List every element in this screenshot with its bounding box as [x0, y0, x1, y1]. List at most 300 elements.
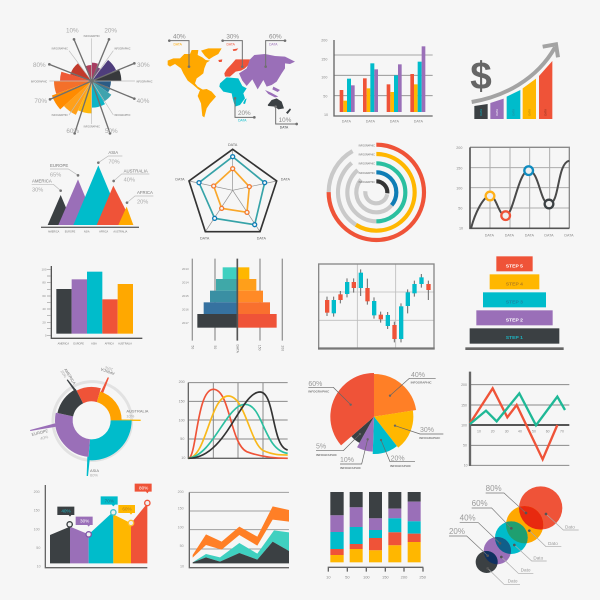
axis labels: 50: [345, 574, 350, 579]
bottom rotated labels: 150: [258, 345, 262, 351]
rose percentage labels: 50%: [105, 128, 118, 135]
region names: AUSTRALIA: [124, 168, 148, 173]
x axis labels: [48, 231, 128, 234]
right bars: [237, 267, 277, 328]
leader dots: [59, 161, 128, 204]
category labels: AFRICA: [105, 343, 114, 346]
panel: concentric ring chart: [324, 140, 429, 245]
radar labels: DATA: [228, 143, 238, 147]
panel: stacked bar chart: [326, 492, 427, 579]
axis labels: 100: [363, 574, 370, 579]
rose leader dots: [48, 38, 136, 135]
ring labels: INFOGRAPHIC: [359, 172, 375, 175]
axis labels: 50: [458, 207, 462, 211]
chart axes: [470, 147, 569, 228]
axis labels: 20: [42, 320, 46, 324]
map data labels: DATA: [173, 43, 183, 47]
bar data labels: DATA: [544, 109, 548, 116]
data markers: [486, 166, 553, 220]
axis labels: 40: [518, 430, 522, 434]
rose percentage labels: 10%: [66, 28, 79, 35]
map data labels: DATA: [280, 125, 289, 129]
region percentages: 70%: [108, 159, 120, 165]
pie percentages: [308, 372, 434, 464]
donut labels: 20%: [59, 369, 68, 379]
dark curve: [188, 392, 288, 458]
axis labels: 100: [461, 424, 467, 428]
pie percentages: 60%: [308, 381, 322, 388]
chart grid: [189, 492, 289, 549]
axis labels: DATA: [390, 119, 399, 123]
chart grid: [319, 264, 434, 349]
panel: candlestick chart: [318, 264, 435, 349]
chart frame: [319, 264, 434, 349]
panel: population pyramid: [182, 259, 284, 354]
rose infographic captions: INFOGRAPHIC: [136, 81, 153, 84]
ring labels: INFOGRAPHIC: [359, 163, 375, 166]
radar orange polygon: [214, 169, 249, 212]
rose infographic captions: INFOGRAPHIC: [52, 47, 68, 50]
radar labels: DATA: [175, 177, 185, 181]
axis labels: 200: [401, 574, 408, 579]
rose percentage labels: 70%: [34, 98, 47, 105]
donut labels: EUROPE: [31, 428, 49, 437]
axis labels: [179, 380, 185, 460]
axis labels: 10: [326, 574, 331, 579]
axis labels: DATA: [525, 234, 534, 238]
axis labels: 200: [461, 383, 467, 387]
rose infographic captions: [31, 35, 153, 129]
rose percentage labels: 60%: [66, 128, 79, 135]
radar labels: DATA: [257, 236, 266, 240]
bubble percentages: 40%: [460, 514, 476, 523]
callout 30%: 30%: [80, 519, 89, 524]
ring labels: [359, 144, 375, 184]
map: Australia: [268, 98, 291, 114]
axis labels: 100: [42, 268, 47, 272]
pie infographic captions: INFOGRAPHIC: [340, 466, 362, 470]
map data labels: DATA: [238, 118, 247, 122]
growth bars: [474, 61, 552, 119]
axis labels: 10: [459, 227, 463, 231]
vertical axis: [466, 372, 473, 466]
map landmasses: [168, 48, 295, 117]
donut segments: [56, 385, 127, 456]
chart frame: [470, 147, 569, 228]
panel: radial rose chart: [31, 28, 153, 135]
bars: [56, 272, 133, 334]
map percentage labels: 20%: [238, 110, 251, 117]
radar labels: DATA: [200, 236, 210, 240]
axis labels: 60: [546, 430, 550, 434]
region names: [32, 150, 153, 195]
panel: overlapping bubbles: [449, 484, 579, 584]
bar data labels: DATA: [479, 109, 483, 116]
pie percentages: 10%: [340, 457, 354, 464]
bubble leader lines: [449, 493, 579, 584]
horizontal grid: [470, 385, 569, 465]
rose wedges: [62, 51, 122, 111]
step base: [465, 347, 564, 350]
bubble leader dots: [486, 512, 547, 570]
area segments: [50, 503, 147, 563]
radar spokes: [189, 149, 277, 232]
region percentages: 30%: [32, 188, 43, 194]
year labels: [182, 267, 189, 325]
pie infographic captions: [308, 381, 441, 470]
mountain peaks: [48, 165, 133, 225]
panel: callout area chart: [34, 484, 152, 568]
panel: zigzag line chart: [461, 372, 569, 468]
x axis labels: EUROPE: [65, 231, 76, 234]
category labels: [58, 343, 132, 346]
teal band: [193, 530, 289, 562]
axis labels: 0: [45, 333, 47, 337]
axes and ticks: [51, 266, 142, 338]
donut pointers: [30, 377, 141, 476]
callout 80%: 80%: [139, 485, 148, 490]
donut labels: 10%: [126, 413, 135, 418]
bottom rotated labels: 200: [280, 346, 284, 351]
bubble captions: Dato: [565, 524, 575, 529]
axis labels: 150: [321, 57, 327, 61]
panel: pie chart: [308, 372, 443, 470]
teal candles: [332, 273, 424, 339]
axis labels: 30: [505, 430, 509, 434]
category labels: ASIA: [91, 343, 97, 346]
axis labels: 80: [42, 281, 46, 285]
donut labels: AFRICA: [100, 367, 115, 376]
axis labels: DATA: [414, 119, 423, 123]
group 2 bars: [363, 63, 378, 112]
chart grid: [470, 147, 569, 228]
axis labels: DATA: [342, 119, 351, 123]
axis labels: DATA: [485, 234, 494, 238]
bar data labels: DATA: [527, 109, 531, 116]
radar labels: [175, 143, 290, 240]
chart markers: [67, 500, 150, 537]
map data labels: DATA: [269, 43, 278, 47]
donut labels: 60%: [90, 472, 98, 477]
rose infographic captions: INFOGRAPHIC: [114, 47, 131, 50]
region percentages: 65%: [50, 172, 61, 178]
green line: [470, 393, 565, 425]
column 4: [388, 492, 401, 562]
pie infographic captions: INFOGRAPHIC: [411, 381, 432, 385]
axis labels: 60: [42, 294, 46, 298]
bubble percentages: 20%: [449, 527, 465, 536]
axis labels: 150: [34, 509, 40, 513]
ring labels: INFOGRAPHIC: [359, 181, 375, 184]
rose thick leader lines: [49, 39, 134, 133]
panel: donut chart: [30, 365, 149, 477]
axis labels: 20: [491, 430, 495, 434]
panel: smooth line chart: [456, 146, 574, 238]
red line: [470, 388, 557, 459]
axis labels: [321, 39, 423, 123]
axis labels: [461, 383, 564, 468]
axis labels: 150: [382, 574, 389, 579]
bar data labels: DATA: [495, 109, 499, 116]
red candles: [325, 282, 431, 339]
orange band: [193, 506, 289, 558]
year labels: 2014: [182, 280, 189, 284]
axis labels: 50: [180, 544, 184, 548]
rose percentage labels: 40%: [137, 98, 150, 105]
region percentages: 20%: [137, 199, 148, 205]
yellow curve: [188, 396, 288, 458]
rose percentage labels: 30%: [137, 62, 150, 69]
pie percentages: 20%: [391, 455, 405, 462]
left bars: [197, 267, 237, 328]
axis labels: 10: [180, 564, 184, 568]
step 1: STEP 1: [506, 335, 523, 341]
axis labels: 10: [37, 564, 41, 568]
axis labels: 200: [321, 39, 327, 43]
year labels: 2016: [182, 308, 189, 312]
pie infographic captions: INFOGRAPHIC: [316, 453, 338, 457]
x axis labels: AMERICA: [48, 231, 60, 234]
baseline: [41, 225, 139, 229]
rose percentage labels: 20%: [104, 28, 117, 35]
axis labels: 10: [181, 456, 185, 460]
panel: bell curves chart: [179, 380, 288, 460]
pie infographic captions: INFOGRAPHIC: [390, 464, 412, 468]
chart axes: [189, 492, 289, 568]
map leader lines: [169, 41, 297, 124]
icon: dollar sign: $: [470, 55, 492, 98]
blue ring: [356, 172, 396, 212]
axis labels: 100: [178, 525, 184, 529]
donut labels: [31, 365, 149, 477]
year labels: 2015: [182, 294, 189, 298]
group 1 bars: [340, 79, 355, 112]
dark band: [193, 542, 289, 563]
axis labels: [178, 490, 184, 568]
yellow ring: [338, 154, 415, 231]
axis labels: 150: [456, 166, 462, 170]
rose infographic captions: INFOGRAPHIC: [52, 114, 68, 117]
bubble percentages: [449, 484, 502, 536]
group 3 bars: [387, 64, 402, 112]
bubble percentages: 60%: [472, 499, 488, 508]
axis labels: DATA: [505, 234, 514, 238]
teal ring: [347, 163, 405, 221]
radar blue nodes: [197, 155, 267, 227]
step 4: STEP 4: [506, 281, 523, 287]
panel: world map: [168, 33, 298, 129]
bubble overlaps: [484, 506, 544, 564]
grey ring tracks: [324, 140, 429, 245]
donut labels: ASIA: [90, 468, 99, 473]
axis labels: 150: [179, 400, 185, 404]
axis labels: 50: [180, 437, 184, 441]
chart axes: [334, 40, 433, 116]
panel: step pyramid: [465, 256, 564, 350]
pie leader dots: [349, 394, 396, 441]
donut labels: AMERICA: [63, 367, 77, 386]
radar labels: DATA: [281, 178, 290, 182]
panel: radar chart: [175, 143, 290, 240]
map percentage labels: 60%: [269, 33, 282, 40]
bubbles: [476, 486, 562, 573]
map: Americas: [168, 48, 222, 117]
grid verticals: [192, 259, 282, 341]
bottom rotated labels: 50: [213, 345, 217, 349]
donut labels: 40%: [40, 434, 49, 441]
panel: region bar chart: [42, 266, 142, 346]
x axis labels: ASIA: [84, 231, 90, 234]
map leader dots: [168, 39, 298, 125]
bubble captions: Dato: [521, 568, 531, 573]
region names: AMERICA: [32, 178, 52, 183]
bubble captions: Dato: [533, 555, 544, 560]
region names: ASIA: [108, 150, 118, 155]
axis labels: 70: [560, 430, 564, 434]
rose infographic captions: INFOGRAPHIC: [114, 114, 131, 117]
region names: AFRICA: [137, 190, 153, 195]
year labels: 2013: [182, 267, 189, 271]
rose percentage labels: 80%: [33, 62, 46, 69]
donut labels: AUSTRALIA: [126, 409, 149, 414]
radar outer pentagon: [189, 149, 277, 232]
axis labels: [34, 490, 41, 568]
red ring: [329, 145, 424, 240]
ring labels: INFOGRAPHIC: [359, 144, 375, 147]
pie percentages: 40%: [411, 372, 425, 379]
chart grid: [188, 383, 288, 458]
axis labels: 200: [179, 380, 185, 384]
map data labels: DATA: [226, 43, 236, 47]
axis labels: 50: [36, 546, 40, 550]
axis labels: 150: [461, 403, 467, 407]
map percentage labels: [173, 33, 292, 124]
axis and ticks: [328, 567, 423, 572]
axis labels: 50: [463, 444, 467, 448]
step 5: STEP 5: [506, 263, 523, 269]
bottom rotated labels: 50: [191, 345, 195, 349]
panel: grouped bar chart: [321, 39, 433, 123]
region percentages: 40%: [124, 178, 135, 184]
x axis labels: AFRICA: [99, 231, 109, 234]
axis labels: 50: [323, 94, 327, 98]
ring labels: INFOGRAPHIC: [359, 154, 375, 157]
axis labels: 100: [321, 76, 327, 80]
step 2: STEP 2: [506, 317, 523, 323]
panel: stacked area chart: [178, 490, 289, 568]
column 1: [330, 492, 344, 562]
map: Africa: [219, 77, 247, 107]
map: Europe: [218, 48, 250, 77]
region percentages: [32, 159, 148, 205]
red curve: [188, 389, 288, 458]
axis labels: [456, 146, 574, 238]
x axis labels: AUSTRALIA: [113, 231, 128, 234]
axis labels: 100: [456, 186, 462, 190]
panel: dollar growth chart: [470, 44, 558, 119]
axis labels: 200: [178, 490, 184, 494]
axis labels: 10: [324, 113, 328, 117]
map percentage labels: 10%: [279, 117, 292, 124]
bar data labels: [479, 109, 548, 116]
group 4 bars: [410, 46, 425, 112]
axis labels: 200: [34, 490, 40, 494]
category labels: EUROPE: [73, 343, 84, 346]
year labels: 2017: [182, 321, 189, 325]
axis labels: 100: [34, 527, 40, 531]
pie percentages: 5%: [316, 444, 326, 451]
candle wicks: [327, 269, 428, 342]
rose infographic captions: INFOGRAPHIC: [84, 126, 100, 129]
chart axes: [188, 383, 288, 458]
axis labels: 40: [42, 307, 46, 311]
callout 40%: 40%: [61, 509, 71, 514]
axis labels: DATA: [564, 234, 574, 238]
bottom rotated labels: [191, 344, 284, 354]
map: Asia: [239, 54, 295, 97]
rose percentage labels: [33, 28, 150, 135]
pie slices: [343, 386, 405, 447]
axis labels: DATA: [544, 234, 554, 238]
column 3: [369, 492, 382, 562]
rose infographic captions: INFOGRAPHIC: [84, 35, 100, 38]
axis labels: 150: [178, 507, 184, 511]
axis labels: 250: [419, 574, 427, 579]
donut halo: [53, 382, 132, 460]
dark ring: [365, 181, 387, 203]
pie infographic captions: INFOGRAPHIC: [308, 389, 330, 393]
teal curve: [188, 404, 288, 458]
pie infographic captions: INFOGRAPHIC: [419, 436, 441, 440]
pie leader lines: [308, 378, 443, 464]
grid lines: [334, 55, 433, 96]
axis labels: 50: [532, 430, 536, 434]
growth arrow: [472, 44, 558, 102]
axis labels: 10: [477, 430, 481, 434]
axis labels: 200: [456, 146, 462, 150]
axis labels: 100: [179, 418, 185, 422]
map percentage labels: 30%: [226, 33, 239, 40]
column 2: [350, 492, 363, 562]
bubble captions: Dato: [548, 541, 558, 546]
callout 60%: 60%: [122, 507, 132, 512]
bubble captions: Dato: [508, 579, 518, 584]
category labels: AUSTRALIA: [118, 343, 132, 346]
bottom rotated labels: DATA: [235, 344, 239, 354]
callout 70%: 70%: [105, 498, 114, 503]
axis labels: [326, 574, 427, 579]
rose thin leader lines: [49, 38, 135, 124]
step 3: STEP 3: [506, 299, 523, 305]
center axis: [235, 259, 240, 341]
radar orange nodes: [212, 167, 251, 214]
axis labels: 10: [464, 464, 468, 468]
region names: EUROPE: [50, 163, 68, 168]
bubble percentages: 80%: [486, 484, 502, 493]
radar teal polygon: [199, 157, 265, 225]
column 5: [408, 492, 421, 562]
category labels: AMERICA: [58, 343, 69, 346]
map percentage labels: 40%: [173, 33, 186, 40]
axis labels: [42, 268, 47, 337]
rose infographic captions: INFOGRAPHIC: [31, 81, 47, 84]
chart axes: [45, 485, 147, 568]
panel: mountain chart: [32, 150, 153, 234]
data curve: [471, 161, 569, 228]
donut labels: 10%: [104, 365, 114, 372]
leader lines: [32, 156, 153, 203]
map data labels: [173, 43, 289, 129]
